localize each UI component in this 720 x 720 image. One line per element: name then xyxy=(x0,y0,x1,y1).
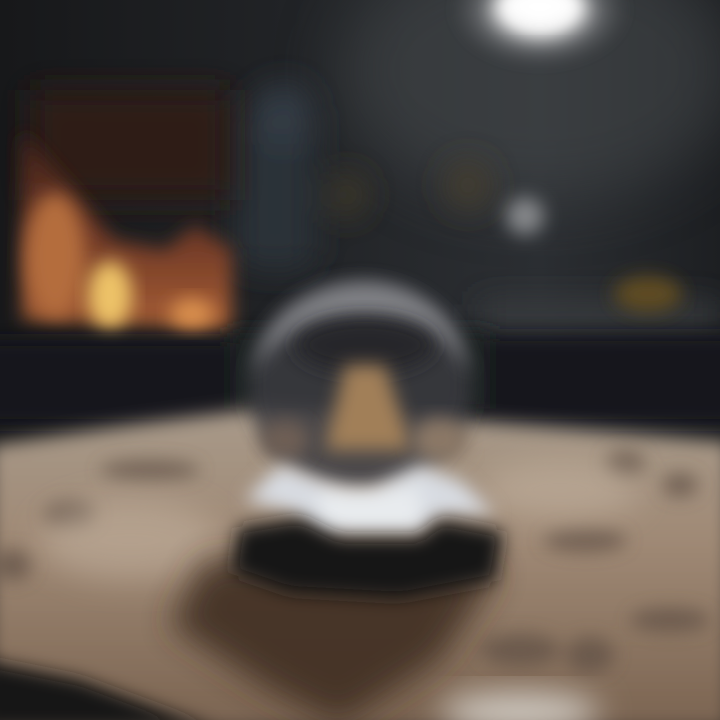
dark corner: bottom left shadow xyxy=(0,660,215,720)
light: ceiling lamp glow xyxy=(340,0,720,200)
crystal dome: glass globe with warm core xyxy=(248,281,472,489)
fireplace: flames on the left xyxy=(22,90,232,330)
bowl shadow: cast on the table xyxy=(170,560,500,720)
dark counter: band behind the table xyxy=(0,330,720,425)
table: parchment map surface xyxy=(0,408,720,720)
shelves: pale orb and brass object xyxy=(506,197,682,312)
white cloth: folded fabric at the dome base xyxy=(245,465,495,535)
black bowl: dark dome stand xyxy=(232,518,503,598)
shelves: dim objects on the back wall xyxy=(235,85,720,328)
